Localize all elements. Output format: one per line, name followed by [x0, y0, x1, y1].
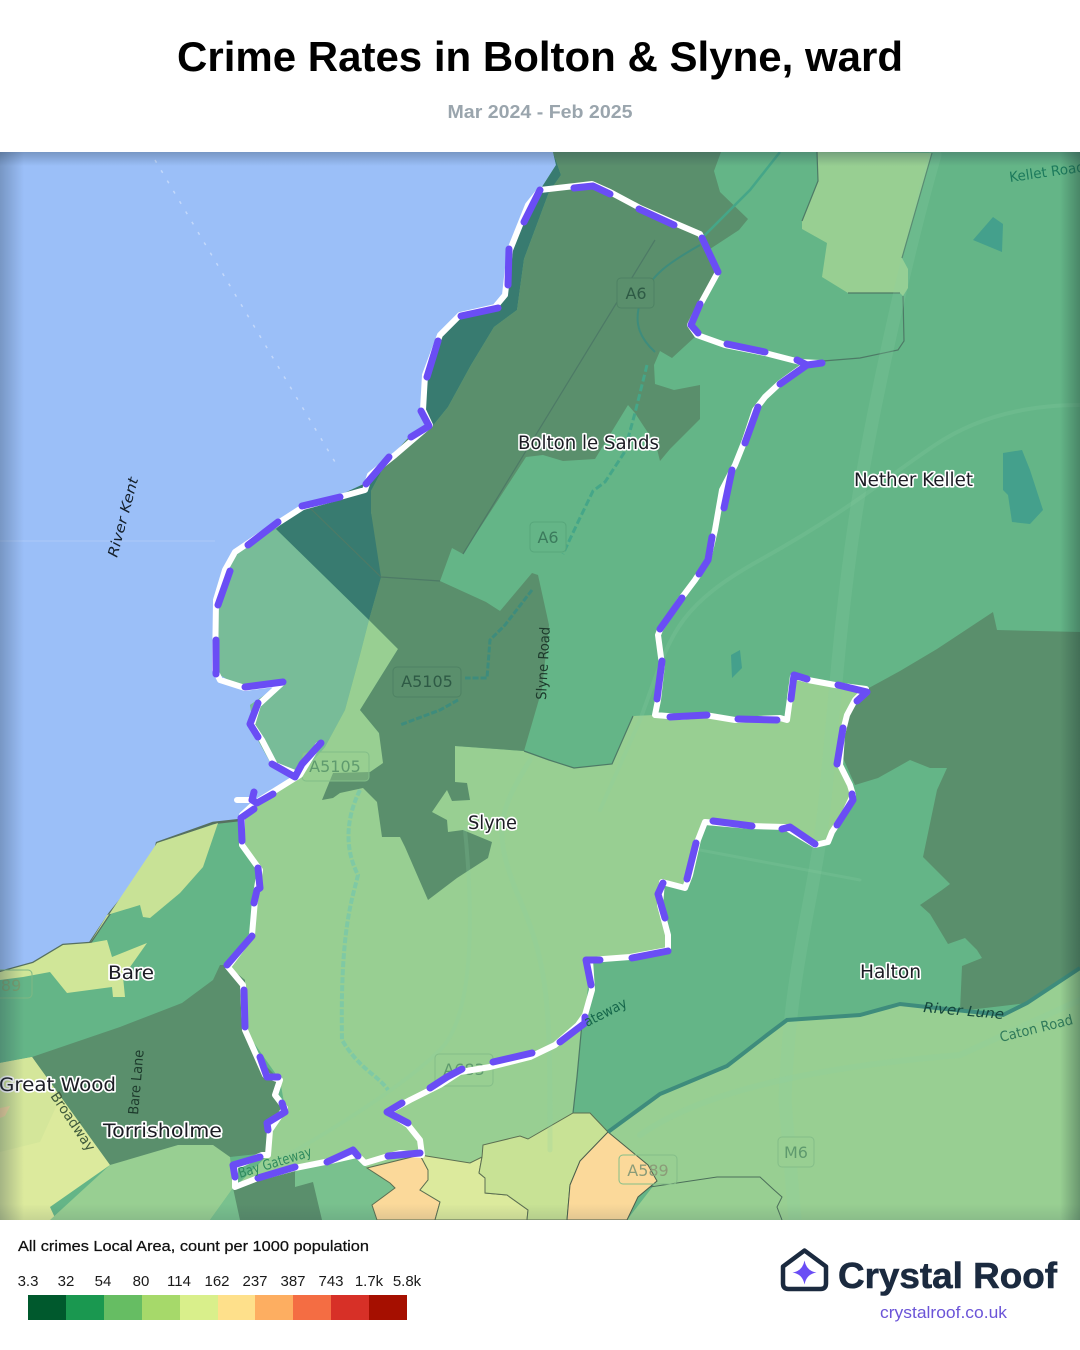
legend scale labels — [18, 1273, 422, 1290]
place: Bare: Bare — [108, 963, 154, 984]
shield: A589 west — [0, 970, 32, 998]
river Lune band — [608, 968, 1080, 1132]
ward boundary: white base line — [215, 184, 866, 1187]
panel: choropleth map — [0, 152, 1080, 1220]
label: Caton Road: Caton Road — [998, 1012, 1075, 1046]
website url: crystalroof.co.uk — [880, 1304, 1008, 1322]
area: south of River Lune — [608, 968, 1080, 1220]
logo wordmark: Crystal Roof — [838, 1255, 1058, 1296]
label: Bare Lane: Bare Lane — [126, 1049, 148, 1115]
legend scale labels: 54 — [95, 1273, 111, 1290]
legend — [18, 1238, 422, 1320]
place: Torrisholme: Torrisholme — [102, 1121, 222, 1142]
area: Torrisholme — [32, 965, 287, 1165]
title: Crime Rates in Bolton & Slyne, ward — [177, 33, 903, 80]
lakes — [731, 217, 1043, 678]
area: small orange patch — [0, 1106, 10, 1118]
area: Bolton le Sands high-crime ward — [322, 152, 748, 900]
shield: A5105 north — [393, 667, 461, 697]
shield: M6 — [778, 1137, 814, 1167]
label: Bay Gateway east: ateway — [582, 995, 630, 1031]
roads: motorway and main roads — [463, 153, 932, 1152]
shield: A589 east — [619, 1155, 677, 1184]
streams — [342, 152, 780, 1090]
road and river names — [47, 160, 1080, 1182]
legend scale labels: 114 — [167, 1273, 191, 1290]
area: north pale-green ward — [802, 152, 932, 296]
base area: mid-green wards — [0, 152, 1080, 1220]
ward boundary lines — [310, 152, 932, 1113]
label: Slyne Road: Slyne Road — [534, 626, 554, 700]
shield: M6: M6 — [784, 1143, 808, 1162]
area: Halton east high-crime ward — [843, 612, 1080, 1011]
area: yellow-green ward south — [479, 1113, 608, 1220]
legend colour bar — [28, 1295, 407, 1320]
area: Bare pale — [0, 940, 147, 997]
shield: A5105 south: A5105 — [309, 757, 361, 776]
place: Slyne: Slyne — [468, 813, 517, 834]
area: pale ward south — [420, 1155, 528, 1220]
area: orange ward east — [567, 1132, 657, 1220]
legend scale labels: 1.7k — [355, 1273, 384, 1290]
label: River Kent: River Kent — [105, 475, 142, 559]
legend scale labels: 5.8k — [393, 1273, 422, 1290]
shield: A6 south: A6 — [537, 528, 559, 547]
legend scale labels: 387 — [280, 1273, 306, 1290]
place: Nether Kellet: Nether Kellet — [854, 470, 973, 491]
shield: A683: A683 — [443, 1060, 485, 1079]
logo: Crystal Roof — [783, 1250, 1058, 1322]
area: saltmarsh light green — [215, 529, 369, 778]
area: south dark ward — [233, 1170, 322, 1220]
area: Great Wood upper band — [0, 1057, 35, 1063]
legend scale labels: 32 — [58, 1273, 74, 1290]
legend scale labels: 3.3 — [18, 1273, 38, 1290]
coastline stroke — [0, 820, 240, 972]
area: Great Wood pale — [0, 1057, 110, 1220]
icon: house with star — [783, 1250, 826, 1289]
place: Great Wood: Great Wood — [0, 1075, 116, 1096]
place: Halton: Halton — [860, 962, 921, 983]
area: orange ward south — [367, 1155, 440, 1220]
legend scale labels: 80 — [133, 1273, 149, 1290]
shield: A683 — [435, 1054, 493, 1086]
water: Morecambe Bay — [0, 152, 556, 972]
area: Bare coast pale — [90, 823, 218, 943]
area: south centre mid green — [210, 1157, 395, 1220]
shipping channel and grid lines on water — [0, 160, 335, 541]
place names — [0, 433, 973, 1142]
shield: A5105 south — [302, 752, 369, 781]
area: coast teal band north — [276, 152, 561, 620]
legend scale labels: 237 — [242, 1273, 268, 1290]
map edge vignette — [0, 152, 1080, 1220]
shield: A5105 north: A5105 — [401, 672, 453, 691]
legend scale labels: 162 — [204, 1273, 230, 1290]
area: Slyne light green — [228, 620, 866, 1187]
area outline: south-east ward — [650, 1177, 782, 1220]
label: Broadway: Broadway — [47, 1089, 98, 1155]
shield: A589 east: A589 — [627, 1161, 669, 1180]
road shield labels — [0, 278, 814, 1184]
legend title: All crimes Local Area, count per 1000 population — [18, 1238, 369, 1255]
label: Bay Gateway west: Bay Gateway — [236, 1144, 314, 1182]
subtitle: date range: Mar 2024 - Feb 2025 — [448, 102, 632, 122]
shield: A6 north: A6 — [625, 284, 647, 303]
ward boundary: purple dashes — [216, 186, 867, 1178]
label: River Lune: River Lune — [923, 1000, 1005, 1023]
shield: A6 south — [530, 522, 566, 552]
area: south-west light green — [50, 1145, 233, 1220]
legend scale labels: 743 — [318, 1273, 344, 1290]
shield: A6 north — [617, 278, 654, 308]
place: Bolton le Sands: Bolton le Sands — [518, 433, 659, 454]
